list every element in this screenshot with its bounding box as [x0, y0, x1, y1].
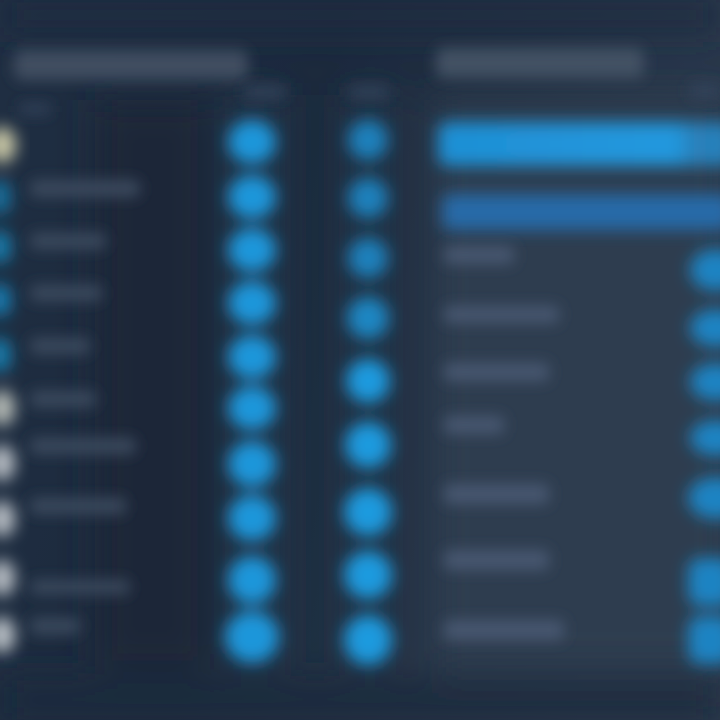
right table: blue value cells [688, 249, 720, 664]
right table: highlighted bar one [438, 122, 720, 166]
right table: row label text [444, 246, 564, 640]
left column: row icons [0, 127, 16, 653]
right table: highlighted bar two [442, 194, 720, 230]
first value column: blue dots [225, 120, 279, 663]
column labels [20, 84, 720, 114]
left column: row label text [30, 180, 140, 634]
heading: right table title [436, 48, 644, 78]
second value column: blue dots [344, 120, 392, 665]
heading: left table title [14, 50, 248, 80]
